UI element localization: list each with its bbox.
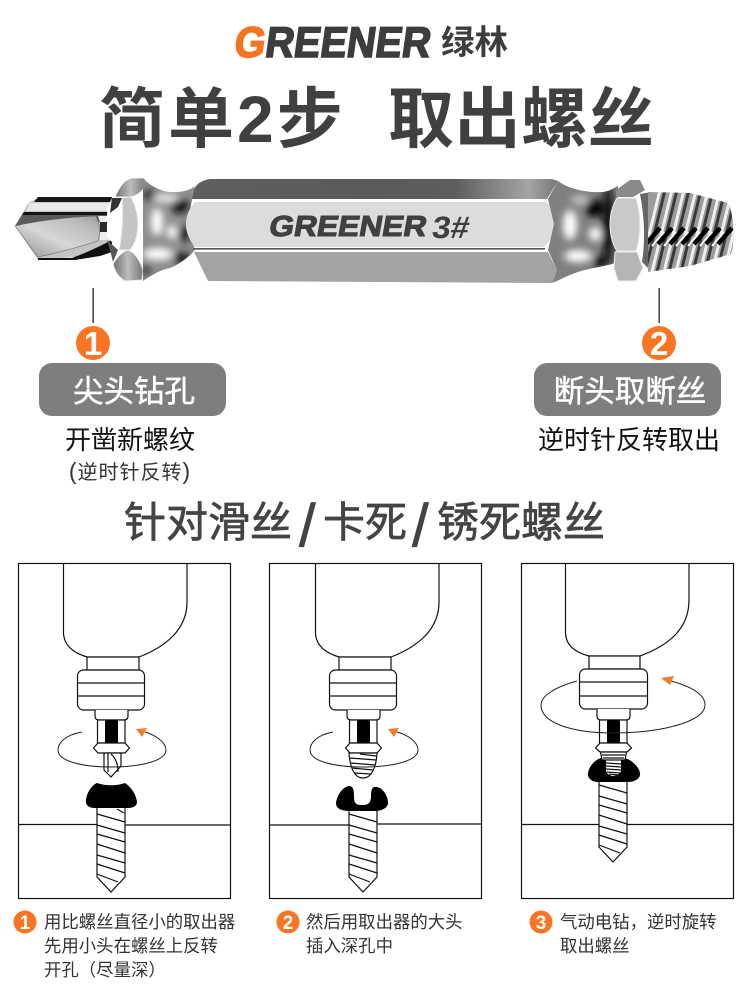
callout 2: number badge [642,325,676,362]
caption text: 先用小头在螺丝上反转 [44,936,218,956]
section heading: 针对滑丝 [124,499,292,546]
callout 1: number badge [76,325,110,362]
logo chinese name: 绿林 [441,25,508,62]
brand logo [232,19,508,67]
title: 简单2步 [99,82,346,156]
shank dark edge [193,248,545,250]
caption text: 取出螺丝 [560,936,630,956]
shank bottom band [194,252,557,283]
rotation arrow [541,676,705,733]
panel frame [18,564,230,898]
callout 2: label pill: 断头取断丝 [554,375,706,409]
caption badge [530,910,552,934]
bit marking: GREENER [267,211,429,243]
screw with drilled head [336,786,388,892]
caption: step 2 [276,910,463,956]
caption text: 插入深孔中 [306,936,393,956]
callout 1: number badge: 1 [84,325,102,362]
section heading: 卡死 [323,499,407,546]
callout 1: label pill [39,363,226,416]
ground line [270,824,482,825]
section heading: / [299,492,316,559]
shank top band [192,179,558,199]
title: 取出螺丝 [388,82,654,156]
caption badge [276,910,300,934]
panel frame [270,564,482,898]
bit marking: 3# [430,210,472,245]
caption: step 1 [14,910,235,980]
callout 1: description: 开凿新螺纹 [65,425,195,455]
bit marking [267,210,472,245]
extractor bit illustration [15,175,744,287]
left neck chrome [143,178,195,281]
ground line [522,824,733,826]
callout 1: note: (逆时针反转) [69,458,191,484]
section heading: / [412,492,429,559]
caption text: 然后用取出器的大头 [306,912,463,932]
caption badge: 3 [536,913,546,934]
callout 2: description: 逆时针反转取出 [538,425,720,455]
panel: step 2 [270,564,482,898]
panel: step 1 [18,564,230,898]
right tapered thread [648,192,734,272]
drill [64,564,187,777]
callout 2: number badge: 2 [650,325,668,362]
caption badge: 1 [20,913,31,934]
callout 2: pointer line [658,288,660,323]
ground line [18,824,230,826]
caption: step 3 [530,910,717,956]
drill [566,564,689,760]
callout 1: label pill: 尖头钻孔 [73,375,195,409]
drill [316,564,439,778]
panel: step 3 [522,564,734,898]
caption text: 开孔（尽量深） [44,960,166,980]
right neck chrome [548,181,618,283]
rotation arrow [58,728,166,767]
rotation arrow [310,728,418,767]
panel frame [522,564,734,898]
callout 2: label pill [534,363,721,416]
caption text: 气动电钻，逆时旋转 [560,912,717,932]
caption badge [14,910,36,934]
shank centre face [186,202,554,247]
screw with extractor seated [588,758,640,862]
caption badge: 2 [283,913,293,934]
right hex collar [610,180,652,281]
section heading: 锈死螺丝 [437,499,605,546]
callout 1: pointer line [92,288,94,323]
left hex collar [107,178,146,281]
stripped screw [86,783,137,892]
logo wordmark: GREENER [232,19,434,67]
left drill tip [15,197,112,260]
caption text: 用比螺丝直径小的取出器 [44,912,235,932]
